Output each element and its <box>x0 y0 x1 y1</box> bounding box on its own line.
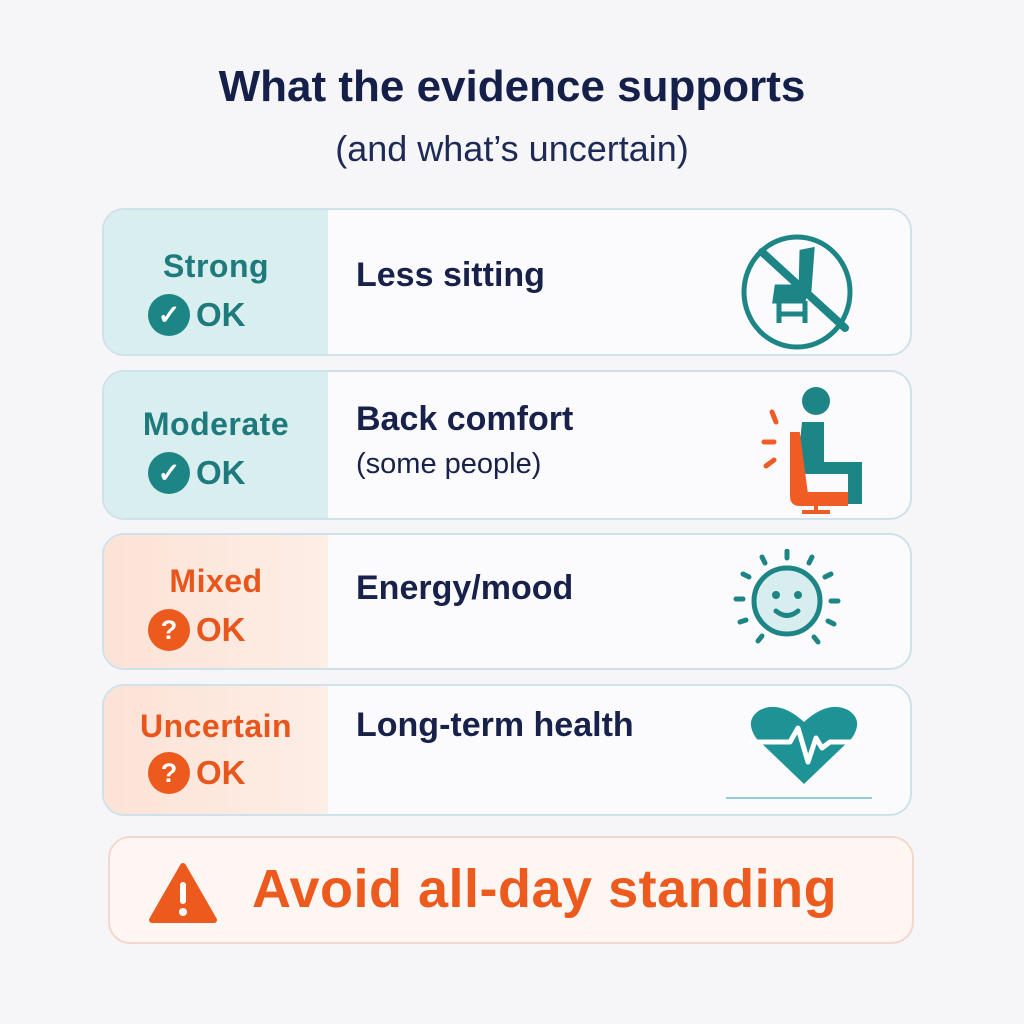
level text: Moderate <box>143 406 289 442</box>
title: What the evidence supports <box>219 62 805 111</box>
level text: Uncertain <box>140 708 292 744</box>
icon: smiling sun <box>734 549 840 644</box>
ok badge: OK <box>196 296 246 333</box>
main text: Long-term health <box>356 706 634 744</box>
ok badge: ✓ <box>158 300 180 330</box>
panel: mixed <box>102 533 912 670</box>
ok badge: ? <box>161 614 177 644</box>
main text: Energy/mood <box>356 569 573 607</box>
icon: heart with pulse <box>726 706 872 799</box>
main text: Less sitting <box>356 256 545 294</box>
ok badge <box>148 452 246 494</box>
ok badge: ? <box>161 758 177 788</box>
ok badge: ✓ <box>158 458 180 488</box>
left label panel <box>104 210 328 354</box>
ok badge: OK <box>196 454 246 491</box>
icon: seated person <box>762 387 862 514</box>
banner text: Avoid all-day standing <box>252 859 837 919</box>
banner: avoid all-day standing <box>108 836 914 944</box>
icon: no chair <box>742 234 852 350</box>
ok badge <box>148 609 246 651</box>
ok badge <box>148 294 246 336</box>
ok badge: OK <box>196 754 246 791</box>
left label panel <box>104 686 328 814</box>
ok badge: OK <box>196 611 246 648</box>
left label panel <box>104 372 328 518</box>
panel: strong <box>102 208 912 356</box>
panel: uncertain <box>102 684 912 816</box>
main text: Back comfort <box>356 400 573 438</box>
subtitle: (and what’s uncertain) <box>335 128 689 169</box>
icon: warning <box>149 863 217 923</box>
level text: Mixed <box>169 563 263 599</box>
panel: moderate <box>102 370 912 520</box>
sub text: (some people) <box>356 448 541 480</box>
left label panel <box>104 535 328 668</box>
level text: Strong <box>163 248 269 284</box>
ok badge <box>148 752 246 794</box>
